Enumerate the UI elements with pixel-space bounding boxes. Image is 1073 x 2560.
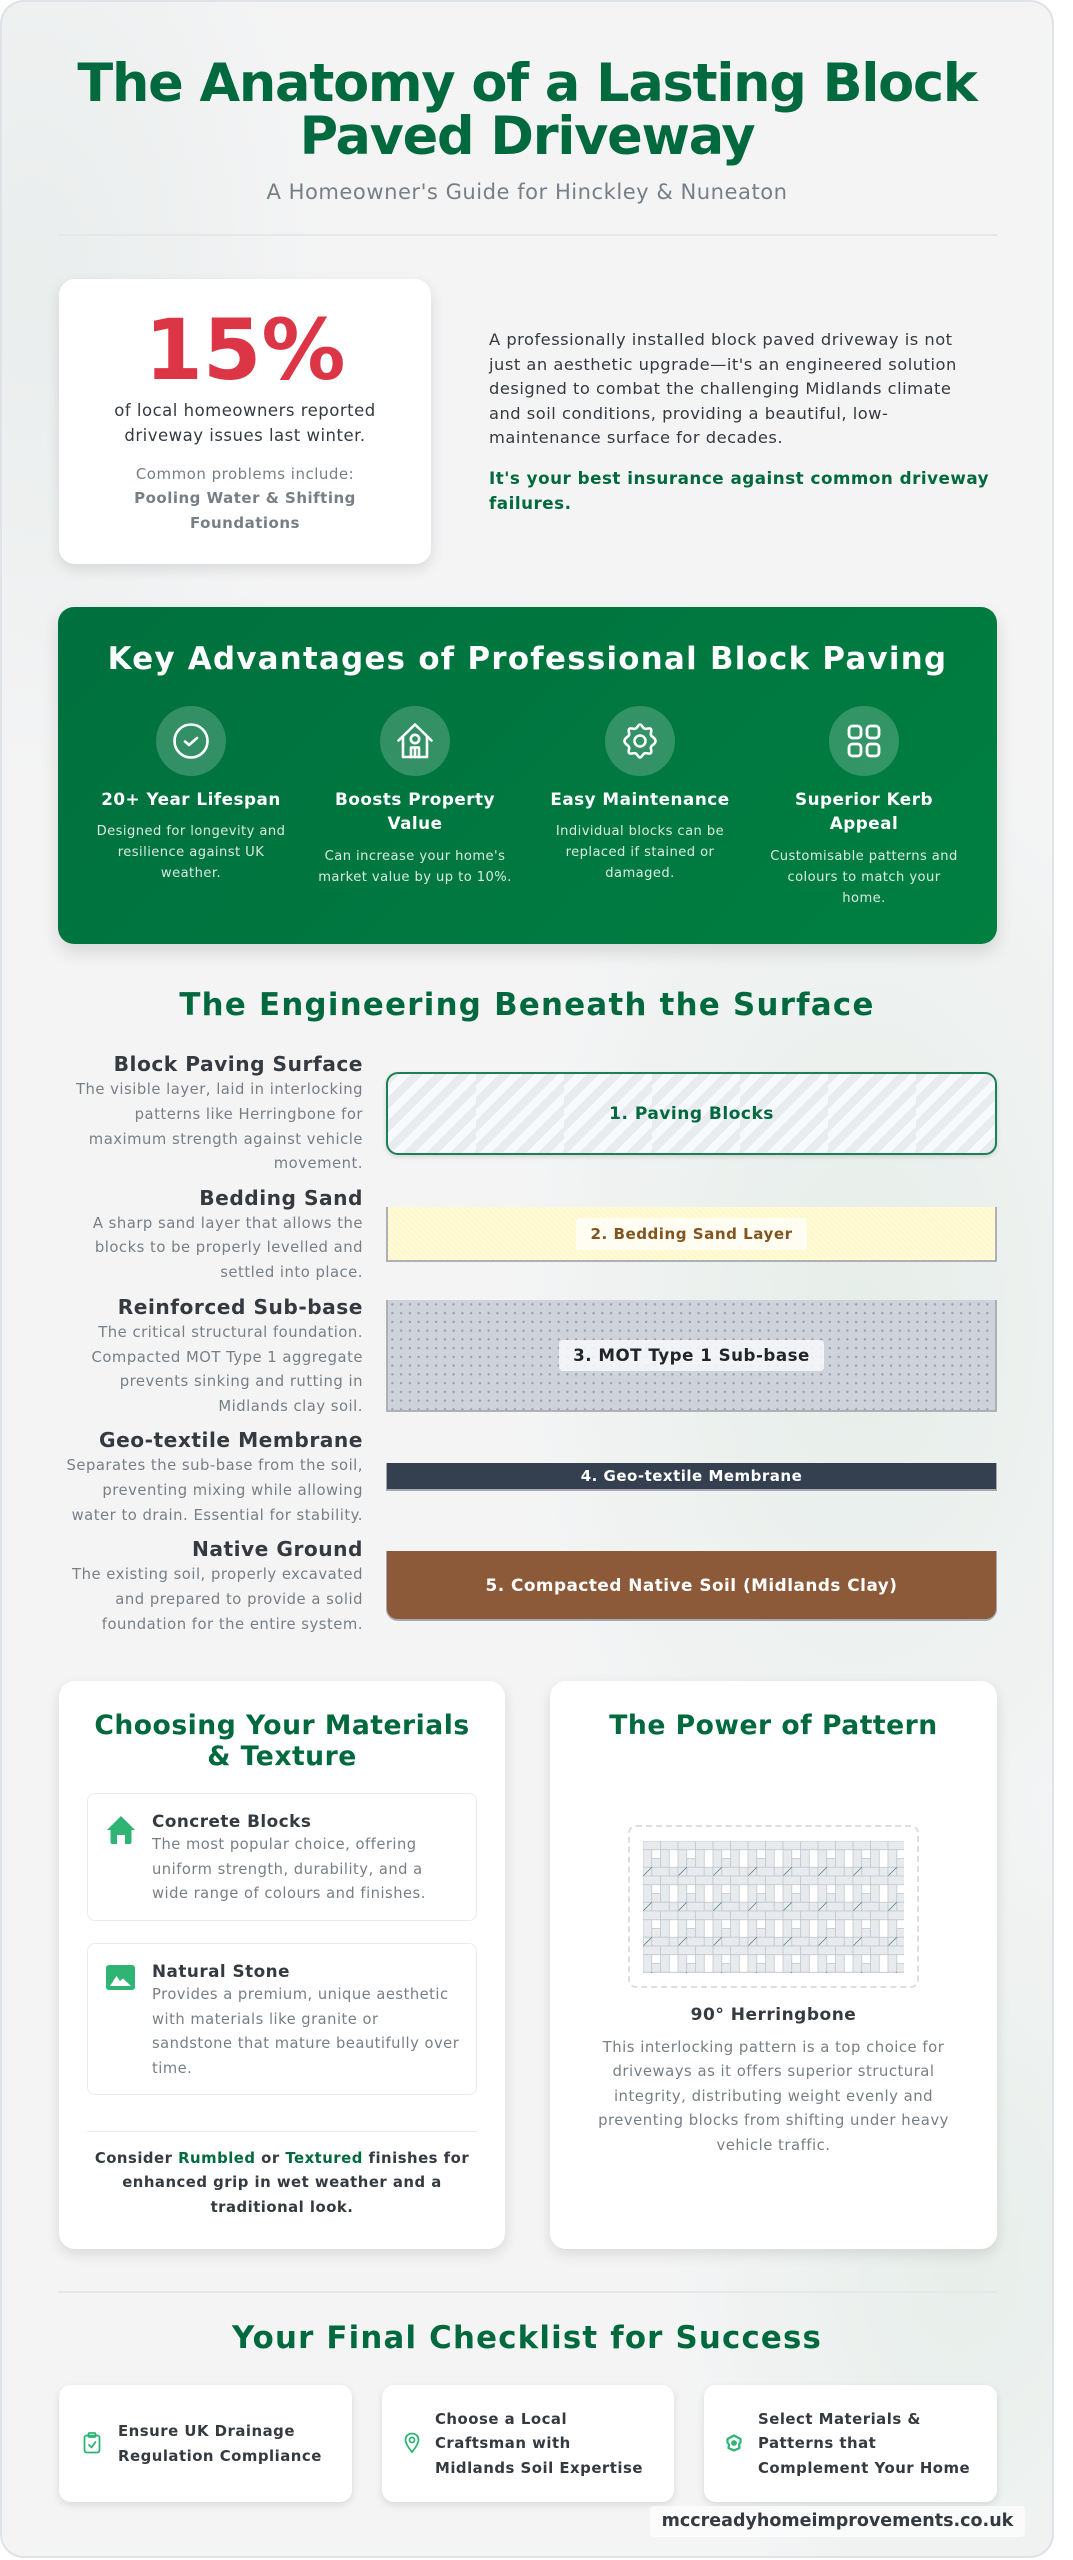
advantage text: damaged. [605, 866, 675, 881]
material: natural stone [87, 1943, 477, 2095]
materials heading: Choosing Your Materials [94, 1710, 470, 1741]
title: Paved Driveway [300, 106, 754, 166]
common problems: Foundations [190, 514, 300, 532]
layer text: block paving: The visible layer, laid in interlocking [76, 1081, 363, 1098]
layer 4: membrane [386, 1463, 997, 1491]
finish tip [95, 2149, 469, 2216]
material text [152, 1986, 459, 2077]
material title: Concrete Blocks [152, 1811, 311, 1831]
layer text: block paving [76, 1052, 363, 1172]
intro paragraph: just an aesthetic upgrade—it's an engineered solution [489, 355, 957, 374]
checklist text: Midlands Soil Expertise [435, 2459, 643, 2477]
statistic caption [114, 401, 376, 445]
layer text: sub-base: The critical structural foundation. [98, 1324, 363, 1341]
advantage text: resilience against UK [118, 845, 264, 860]
layer 3: MOT sub-base [386, 1300, 997, 1412]
icon: location pin [404, 2432, 420, 2454]
layer text: sub-base: Reinforced Sub-base [118, 1295, 363, 1319]
layer text: sub-base: prevents sinking and rutting in [120, 1373, 363, 1390]
checklist text: Patterns that [758, 2434, 876, 2452]
advantage text: colours to match your [787, 870, 941, 885]
website footer tag: mccreadyhomeimprovements.co.uk [662, 2511, 1013, 2531]
statistic caption: driveway issues last winter. [124, 426, 366, 445]
icon: clipboard [84, 2432, 100, 2454]
advantage text: market value by up to 10%. [318, 870, 512, 885]
layer text: block paving: maximum strength against vehicle [89, 1131, 363, 1148]
icon: house [107, 1816, 135, 1844]
layer text: membrane: water to drain. Essential for stability. [72, 1507, 363, 1524]
advantage: kerb appeal [770, 706, 958, 906]
pattern heading: The Power of Pattern [609, 1710, 938, 1741]
advantage: property value [318, 706, 512, 885]
layer text: sub-base: Compacted MOT Type 1 aggregate [92, 1348, 363, 1366]
heading: checklist: Your Final Checklist for Success [232, 2320, 822, 2356]
icon: home [380, 706, 450, 776]
advantage text [556, 824, 724, 881]
intro paragraph [488, 330, 957, 447]
advantage text: home. [842, 891, 886, 906]
material text: wide range of colours and finishes. [152, 1885, 426, 1902]
checklist text: Select Materials & [758, 2410, 921, 2428]
advantage: maintenance [550, 706, 730, 881]
layer text: bedding sand: A sharp sand layer that allows the [93, 1215, 363, 1232]
material text: time. [152, 2060, 192, 2077]
pattern text: vehicle traffic. [716, 2136, 831, 2154]
material: concrete [87, 1793, 477, 1921]
advantage text: Individual blocks can be [556, 824, 724, 839]
checklist item: craftsman [382, 2385, 674, 2502]
advantage text: weather. [161, 866, 221, 881]
title: The Anatomy of a Lasting Block [77, 53, 977, 114]
herringbone diagram [628, 1825, 919, 1988]
pattern text: This interlocking pattern is a top choice for [603, 2038, 944, 2056]
advantage: lifespan [97, 706, 285, 881]
intro paragraph: maintenance surface for decades. [489, 428, 783, 447]
pattern text: driveways as it offers superior structural [612, 2062, 935, 2080]
layer text: membrane [66, 1428, 363, 1524]
advantage text [97, 824, 285, 881]
checklist text [118, 2422, 322, 2465]
layer 1: paving blocks [386, 1072, 997, 1155]
statistic caption: of local homeowners reported [114, 401, 376, 420]
advantage title [335, 788, 495, 833]
layer 2: bedding sand [386, 1207, 997, 1262]
material text [152, 1836, 426, 1902]
layer text: native ground [72, 1537, 363, 1633]
advantage title: Superior Kerb [795, 788, 933, 808]
layer text: native ground: and prepared to provide a solid [115, 1591, 363, 1608]
checklist text: Regulation Compliance [118, 2447, 322, 2465]
advantage title: Appeal [830, 813, 898, 833]
layer text: bedding sand: blocks to be properly levelled and [95, 1239, 363, 1256]
checklist item: materials [704, 2385, 997, 2502]
layer text: membrane: Separates the sub-base from the soil, [66, 1457, 363, 1474]
finish tip: enhanced grip in wet weather and a [122, 2173, 442, 2191]
advantage title [795, 788, 933, 833]
layer text: block paving: movement. [274, 1155, 363, 1172]
layer text: sub-base [92, 1295, 363, 1415]
advantages heading: Key Advantages of Professional Block Paving [108, 641, 947, 677]
layer text: block paving: patterns like Herringbone for [135, 1106, 363, 1123]
icon: badge [726, 2434, 742, 2452]
layer text: native ground: Native Ground [192, 1537, 363, 1561]
layer text: bedding sand: settled into place. [220, 1264, 363, 1281]
advantage title: Boosts Property [335, 788, 495, 808]
layer text: native ground: The existing soil, properly excavated [72, 1566, 363, 1583]
layer label [559, 1340, 824, 1370]
finish tip: Consider Rumbled or Textured finishes for [95, 2149, 469, 2167]
advantage text [318, 849, 512, 885]
common problems: Pooling Water & Shifting [134, 489, 356, 507]
material text: uniform strength, durability, and a [152, 1861, 423, 1878]
pattern text [598, 2038, 949, 2154]
layer text: membrane: preventing mixing while allowing [102, 1482, 363, 1499]
layer text: sub-base: Midlands clay soil. [218, 1398, 363, 1415]
layer label: 2. Bedding Sand Layer [590, 1224, 793, 1242]
layer 4: membrane: 4. Geo-textile Membrane [581, 1467, 802, 1485]
panel: materials [59, 1681, 505, 2249]
intro callout: It's your best insurance against common driveway [489, 468, 989, 488]
layer text: block paving: Block Paving Surface [114, 1052, 363, 1076]
material text: The most popular choice, offering [152, 1836, 417, 1853]
layer 1: paving blocks: 1. Paving Blocks [609, 1104, 774, 1124]
intro paragraph: A professionally installed block paved driveway is not [489, 330, 953, 349]
pattern text: preventing blocks from shifting under heavy [598, 2111, 949, 2129]
checklist text: Complement Your Home [758, 2459, 970, 2477]
intro callout [489, 468, 989, 513]
intro paragraph: and soil conditions, providing a beautiful, low- [489, 404, 888, 423]
materials heading: & Texture [207, 1741, 357, 1772]
layer label: 3. MOT Type 1 Sub-base [573, 1344, 810, 1364]
common problems: Common problems include: [136, 464, 354, 482]
advantage text: Can increase your home's [325, 849, 505, 864]
finish tip: traditional look. [211, 2198, 353, 2216]
checklist text [758, 2410, 970, 2477]
icon: gear [605, 706, 675, 776]
website footer tag [650, 2506, 1025, 2537]
materials heading [94, 1710, 470, 1772]
panel: key advantages [58, 607, 997, 944]
advantage title: Value [388, 813, 442, 833]
layer text: bedding sand: Bedding Sand [199, 1186, 363, 1210]
common problems [134, 464, 356, 532]
pattern text: integrity, distributing weight evenly and [614, 2087, 933, 2105]
advantage text: Designed for longevity and [97, 824, 285, 839]
advantage title: 20+ Year Lifespan [101, 788, 281, 808]
icon: grid [829, 706, 899, 776]
layer label [576, 1218, 807, 1250]
checklist text: Ensure UK Drainage [118, 2422, 295, 2440]
intro callout: failures. [489, 493, 571, 513]
checklist text: Craftsman with [435, 2434, 571, 2452]
material text: with materials like granite or [152, 2011, 379, 2028]
layer text: bedding sand [93, 1186, 363, 1281]
advantage title: Easy Maintenance [550, 788, 730, 808]
panel: 15% statistic [59, 279, 431, 564]
layer text: membrane: Geo-textile Membrane [99, 1428, 363, 1452]
layer 5: native soil: 5. Compacted Native Soil (Midlands Clay) [486, 1575, 897, 1595]
intro paragraph: designed to combat the challenging Midlands climate [489, 379, 951, 398]
layer text: native ground: foundation for the entire system. [102, 1616, 363, 1633]
checklist text [435, 2410, 643, 2477]
checklist text: Choose a Local [435, 2410, 567, 2428]
heading: engineering: The Engineering Beneath the Surface [179, 987, 875, 1023]
material text: Provides a premium, unique aesthetic [152, 1986, 449, 2003]
advantage text [770, 849, 958, 906]
subtitle: A Homeowner's Guide for Hinckley & Nuneaton [266, 179, 788, 204]
checklist item: compliance [59, 2385, 352, 2502]
title [77, 53, 979, 166]
panel: pattern [550, 1681, 997, 2249]
layer 5: native soil [386, 1551, 997, 1621]
advantage text: replaced if stained or [566, 845, 714, 860]
material title: Natural Stone [152, 1961, 290, 1981]
statistic number: 15% [144, 301, 346, 399]
advantage text: Customisable patterns and [770, 849, 958, 864]
pattern name: 90° Herringbone [691, 2005, 856, 2025]
icon: landscape [106, 1965, 135, 1990]
material text: sandstone that mature beautifully over [152, 2035, 459, 2052]
icon: check circle [156, 706, 226, 776]
